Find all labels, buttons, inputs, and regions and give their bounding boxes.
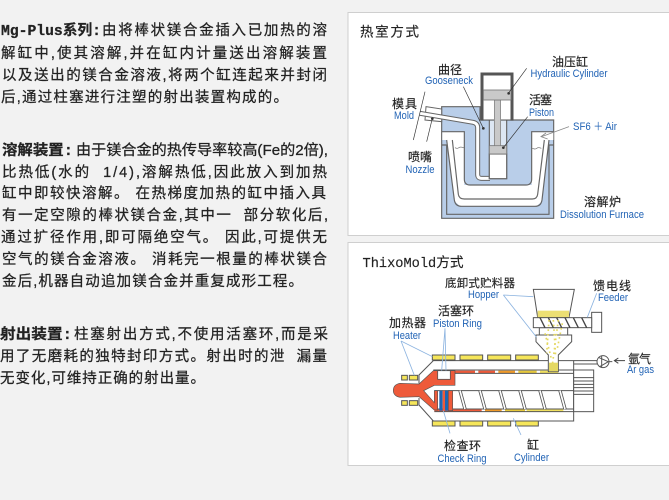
paragraph: melting unit (1, 141, 328, 290)
label: gooseneck (425, 63, 473, 87)
paragraph: melting unit: 金后,机器自动追加镁合金并重复成形工程。 (2, 272, 303, 290)
label: gooseneck: 曲径 (438, 63, 462, 77)
diagram: hot chamber machine (413, 68, 569, 218)
label: piston ring (433, 303, 482, 330)
paragraph: melting unit: 有一定空隙的棒状镁合金,其中一 部分软化后, (2, 207, 328, 224)
label: mold (392, 97, 417, 122)
label: mold: Mold (394, 110, 414, 122)
text column (0, 21, 328, 387)
panel: hot chamber method (348, 12, 669, 236)
label: feeder: Feeder (598, 292, 628, 304)
label: bottom-discharge hopper: Hopper (468, 289, 499, 301)
leader lines (401, 293, 597, 435)
label: piston: Piston (529, 107, 554, 119)
paragraph: injection unit: 用了无磨耗的独特封印方式。射出时的泄 漏量 (0, 348, 327, 365)
label: argon gas: Ar gas (627, 364, 654, 376)
label: nozzle: 喷嘴 (408, 150, 432, 164)
label: nozzle (406, 150, 434, 176)
label: mold: 模具 (392, 97, 417, 111)
label: piston (529, 92, 554, 119)
label: dissolution furnace (560, 194, 644, 221)
falling granules (545, 320, 562, 365)
paragraph: Mg-Plus series (1, 21, 327, 106)
paragraph: melting unit: 比热低(水的 1/4),溶解热低,因此放入到加热 (2, 164, 328, 181)
paragraph: Mg-Plus series: 由将棒状镁合金插入已加热的溶 (102, 22, 327, 39)
label: hydraulic cylinder (530, 54, 608, 80)
label: piston: 活塞 (529, 92, 552, 107)
label: heater: 加热器 (389, 316, 426, 330)
heaters (402, 355, 538, 426)
melt red (393, 371, 455, 410)
hopper (533, 289, 574, 317)
label: hydraulic cylinder: 油压缸 (552, 54, 588, 69)
barrel inner strips (455, 371, 475, 373)
paragraph: Mg-Plus series: 后,通过柱塞进行注塑的射出装置构成的。 (1, 88, 288, 106)
paragraph: Mg-Plus series: 解缸中,使其溶解,并在缸内计量送出溶解装置 (1, 44, 327, 62)
label: dissolution furnace: Dissolution Furnace (560, 209, 644, 221)
label: check ring: 检查环 (444, 438, 481, 453)
label: check ring (438, 438, 486, 465)
paragraph: melting unit: 溶解装置: (2, 141, 73, 160)
paragraph: injection unit (0, 325, 328, 387)
diagram: ThixoMold machine (393, 289, 625, 435)
heading: hot chamber: 热室方式 (360, 24, 420, 42)
heading: ThixoMold: ThixoMold方式 (362, 255, 464, 272)
label: argon gas: 氩气 (628, 351, 651, 366)
label: cylinder: 缸 (527, 437, 539, 452)
label: nozzle: Nozzle (406, 164, 434, 176)
label: cylinder (514, 437, 549, 464)
label: check ring: Check Ring (438, 453, 486, 465)
feeder (539, 328, 568, 335)
label: piston ring: 活塞环 (438, 303, 474, 318)
label: feeder (593, 279, 631, 304)
paragraph: Mg-Plus series: 以及送出的镁合金溶液,将两个缸连起来并封闭 (2, 66, 327, 84)
label: dissolution furnace: 溶解炉 (584, 194, 621, 209)
panel: ThixoMold method (348, 242, 669, 466)
label: heater (389, 316, 426, 342)
label: SF6 + Air: SF6 ＋ Air (573, 121, 617, 133)
label: bottom-discharge hopper: 底卸式贮料器 (445, 276, 516, 290)
paragraph: Mg-Plus series: Mg-Plus系列: (1, 21, 101, 40)
label: cylinder: Cylinder (514, 452, 549, 464)
label: gooseneck: Gooseneck (425, 75, 473, 87)
label: argon gas (627, 351, 654, 376)
label: hydraulic cylinder: Hydraulic Cylinder (530, 68, 608, 80)
paragraph: injection unit: 射出装置: (0, 325, 72, 344)
paragraph: melting unit: 缸中即较快溶解。 在热梯度加热的缸中插入具 (2, 184, 326, 202)
label: piston ring: Piston Ring (433, 318, 482, 330)
argon valve (574, 356, 625, 368)
paragraph: melting unit: 空气的镁合金溶液。 消耗完一根量的棒状镁合 (2, 251, 328, 268)
leader lines (413, 68, 569, 148)
paragraph: melting unit: 由于镁合金的热传导率较高(Fe的2倍), (76, 141, 328, 159)
paragraph: injection unit: 无变化,可维持正确的射出量。 (0, 370, 205, 387)
screw flights (460, 391, 565, 409)
label: feeder: 馈电线 (593, 279, 631, 293)
barrel outline (419, 361, 594, 421)
label: heater: Heater (393, 330, 421, 342)
funnel (536, 335, 572, 372)
paragraph: melting unit: 通过扩径作用,即可隔绝空气。 因此,可提供无 (1, 229, 327, 246)
label: bottom-discharge hopper (445, 276, 516, 301)
paragraph: injection unit: 柱塞射出方式,不使用活塞环,而是采 (74, 325, 328, 343)
